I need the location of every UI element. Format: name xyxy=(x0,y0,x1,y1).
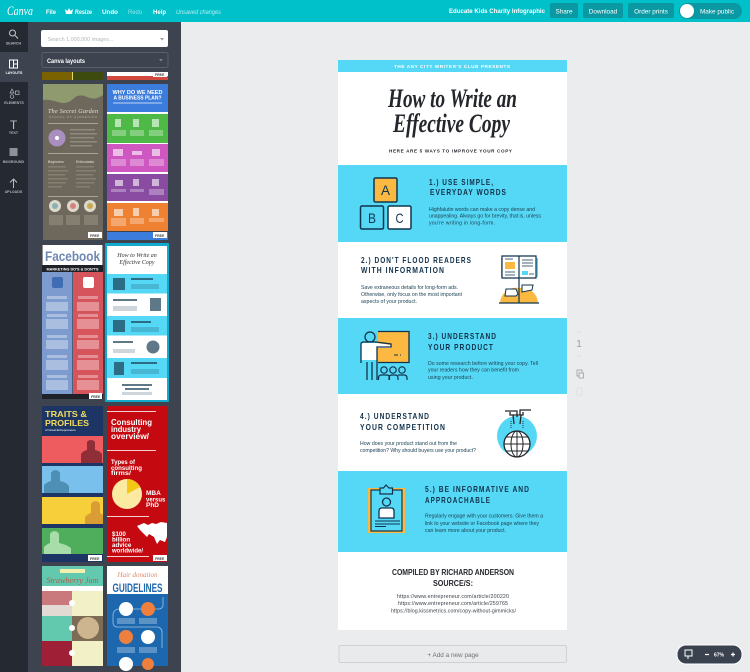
credits: https://blog.kissmetrics.com/copy-without-gimmicks/ xyxy=(391,608,517,614)
thumbnail: Consulting: versus xyxy=(146,498,166,504)
heading: WITH INFORMATION xyxy=(361,266,445,275)
icon: ABC blocks: C xyxy=(396,210,404,226)
thumbnail: Facebook xyxy=(42,245,103,399)
thumbnail: Hair donation: Hair donation xyxy=(116,571,158,579)
body text xyxy=(360,441,476,454)
thumbnail: business plan: A BUSINESS PLAN? xyxy=(114,96,162,102)
thumbnail: Strawberry Jam: Strawberry Jam xyxy=(46,576,99,585)
thumbnail: Secret Garden: Enthusiasts xyxy=(76,160,94,164)
body text: Regularly engage with your customers. Give them a xyxy=(425,514,543,520)
thumbnail: Consulting: consulting xyxy=(111,465,142,472)
thumbnail: business plan: WHY DO WE NEED xyxy=(112,90,162,96)
thumbnail: selected How to Write: Effective Copy xyxy=(118,259,155,266)
thumbnail: Traits & Profiles: PROFILES xyxy=(45,418,89,428)
thumbnail: Consulting: PhD xyxy=(146,502,159,509)
toolbar buttons: Make public xyxy=(700,8,735,16)
document title: Educate Kids Charity Infographic xyxy=(449,8,546,15)
body text: Do some research before writing your copy. Tell xyxy=(428,361,538,367)
layouts side panel xyxy=(28,22,181,672)
body text xyxy=(361,285,463,305)
icon: text: T xyxy=(10,118,18,132)
icon: ABC blocks: A xyxy=(381,182,391,198)
thumbnail: Traits & Profiles xyxy=(42,406,103,562)
menu: Undo xyxy=(102,9,118,16)
toolbar buttons: Share xyxy=(555,8,573,16)
icon: uploads xyxy=(5,179,23,194)
body text: unappealing. Always go for brevity, that is, unless xyxy=(429,214,541,220)
thumbnail: business plan xyxy=(107,84,168,240)
body text: Highfalutin words can make a copy dense and xyxy=(429,207,535,213)
menu: Redo xyxy=(128,9,142,16)
thumbnail: Consulting: billion xyxy=(112,536,130,544)
menu: Resize xyxy=(75,9,92,16)
body text: competition? Why should buyers use your product? xyxy=(360,448,476,454)
section 4 xyxy=(360,410,537,457)
icon: background: BKGROUND xyxy=(3,160,24,164)
heading: 5.) BE INFORMATIVE AND xyxy=(425,485,530,494)
thumbnail: Traits & Profiles: FREE xyxy=(90,557,100,561)
body text: link to your website or Facebook page where they xyxy=(425,521,539,527)
body text: can learn more about your product. xyxy=(425,528,506,534)
icon: ABC blocks: B xyxy=(368,210,376,226)
left icon rail xyxy=(0,22,28,672)
body text xyxy=(425,514,543,534)
thumbnail: Hair donation: GUIDELINES xyxy=(112,583,163,595)
top toolbar xyxy=(0,0,750,22)
body text: using your product. xyxy=(428,375,473,381)
icon: text: TEXT xyxy=(9,131,19,135)
body text: Otherwise, only focus on the most important xyxy=(361,292,463,298)
body text: Save extraneous details for long-form ads. xyxy=(361,285,458,291)
thumbnail: selected How to Write: How to Write an xyxy=(116,253,157,259)
icon: search: SEARCH xyxy=(6,42,21,46)
credits: SOURCE/S: xyxy=(433,579,473,588)
add a new page button: + Add a new page xyxy=(427,652,479,659)
section 2 xyxy=(361,256,539,305)
icon: search xyxy=(6,30,21,46)
icon: globe stand xyxy=(497,410,537,457)
heading xyxy=(429,178,507,197)
icon: open book plant xyxy=(499,256,539,303)
heading: 4.) UNDERSTAND xyxy=(360,412,430,421)
icon: layouts xyxy=(6,60,23,75)
thumbnail: Consulting: industry xyxy=(111,425,142,434)
thumbnail: Secret Garden: FREE xyxy=(90,234,100,238)
search box: Search 1,000,000 images... xyxy=(48,37,114,43)
thumbnail: Traits & Profiles: of Great Entrepreneurs xyxy=(45,428,76,432)
credits: https://www.entrepreneur.com/article/200220 xyxy=(397,594,509,600)
page controls: 1 xyxy=(576,339,582,350)
thumbnail strips: FREE xyxy=(155,73,165,77)
icon: ABC blocks xyxy=(360,178,411,229)
toolbar buttons: Download xyxy=(589,8,618,16)
menu xyxy=(46,8,222,16)
thumbnail: Consulting: FREE xyxy=(155,557,165,561)
thumbnail: Secret Garden xyxy=(43,84,103,240)
icon: elements: ELEMENTS xyxy=(4,101,24,105)
menu: File xyxy=(46,9,56,16)
icon: uploads: UPLOADS xyxy=(5,190,23,194)
menu: Help xyxy=(153,9,166,16)
header band xyxy=(338,60,567,72)
icon: clipboard profile xyxy=(368,485,405,533)
thumbnail: Consulting: firms/ xyxy=(111,470,131,477)
body text: you're writing in long-form. xyxy=(429,220,495,226)
section 5 xyxy=(338,471,567,552)
heading: 3.) UNDERSTAND xyxy=(428,332,497,341)
header band: THE ANY CITY WRITER'S CLUB PRESENTS xyxy=(394,64,510,69)
title: Effective Copy xyxy=(392,109,510,138)
heading: 1.) USE SIMPLE, xyxy=(429,178,494,187)
heading: EVERYDAY WORDS xyxy=(430,188,507,197)
heading: YOUR COMPETITION xyxy=(360,423,446,432)
thumbnail: Secret Garden: SCHOOL OF GARDENING xyxy=(49,115,97,119)
thumbnail: Strawberry Jam xyxy=(42,566,103,666)
credits: COMPILED BY RICHARD ANDERSON xyxy=(392,568,514,577)
thumbnail: Secret Garden: The Secret Garden xyxy=(48,109,98,115)
heading: YOUR PRODUCT xyxy=(428,343,494,352)
body text xyxy=(429,207,541,226)
thumbnail: Consulting: Types of xyxy=(111,459,136,466)
icon: presenter at board xyxy=(361,332,409,380)
zoom control: 67% xyxy=(714,652,725,658)
page controls xyxy=(576,331,584,395)
thumbnail: Secret Garden: Beginners xyxy=(48,160,64,164)
menu: Unsaved changes xyxy=(176,9,222,16)
infographic page xyxy=(338,60,567,630)
thumbnail strips xyxy=(42,72,168,80)
toolbar buttons: Order prints xyxy=(634,8,668,16)
body text xyxy=(428,361,538,381)
thumbnail: Consulting: $100 xyxy=(112,531,126,538)
heading xyxy=(360,412,446,432)
heading xyxy=(361,256,472,275)
heading: 2.) DON'T FLOOD READERS xyxy=(361,256,472,265)
heading: APPROACHABLE xyxy=(425,496,491,505)
thumbnail: Hair donation xyxy=(107,566,168,671)
thumbnail: Consulting: Consulting xyxy=(111,418,152,427)
thumbnail: Consulting: MBA xyxy=(146,490,161,497)
heading xyxy=(428,332,497,352)
thumbnail: Traits & Profiles: TRAITS & xyxy=(45,409,87,419)
thumbnail: Consulting: overview/ xyxy=(111,432,150,441)
logo: Canva xyxy=(7,3,33,18)
zoom control xyxy=(677,645,742,664)
layouts dropdown xyxy=(42,52,168,68)
layouts dropdown: Canva layouts xyxy=(47,58,85,65)
toolbar buttons xyxy=(550,3,742,19)
thumbnail: Facebook: MARKETING DO'S & DON'TS xyxy=(46,268,99,272)
title xyxy=(387,84,517,138)
thumbnail: Facebook: FREE xyxy=(91,395,101,399)
section 1 xyxy=(338,165,567,242)
credits: https://www.entrepreneur.com/article/259765 xyxy=(398,601,508,607)
thumbnail: Consulting: worldwide/ xyxy=(111,548,143,554)
section 3 xyxy=(338,318,567,394)
title: How to Write an xyxy=(387,84,517,113)
body text: aspects of your product. xyxy=(361,299,417,305)
icon: elements xyxy=(4,89,24,105)
add a new page button xyxy=(339,646,566,662)
thumbnail: selected How to Write xyxy=(105,243,169,402)
body text: How does your product stand out from the xyxy=(360,441,457,447)
subtitle: HERE ARE 5 WAYS TO IMPROVE YOUR COPY xyxy=(389,148,512,154)
search box xyxy=(41,30,168,47)
icon: layouts: LAYOUTS xyxy=(6,71,23,75)
icon: background xyxy=(3,148,24,164)
thumbnail: Consulting: advice xyxy=(112,542,132,549)
icon: text xyxy=(9,118,19,135)
thumbnail: Consulting xyxy=(107,406,168,562)
heading xyxy=(425,485,530,505)
thumbnail: business plan: FREE xyxy=(155,234,165,238)
thumbnail: Facebook: Facebook xyxy=(45,248,100,264)
body text: your readers how they can benefit from xyxy=(428,368,519,374)
credits xyxy=(391,568,517,614)
